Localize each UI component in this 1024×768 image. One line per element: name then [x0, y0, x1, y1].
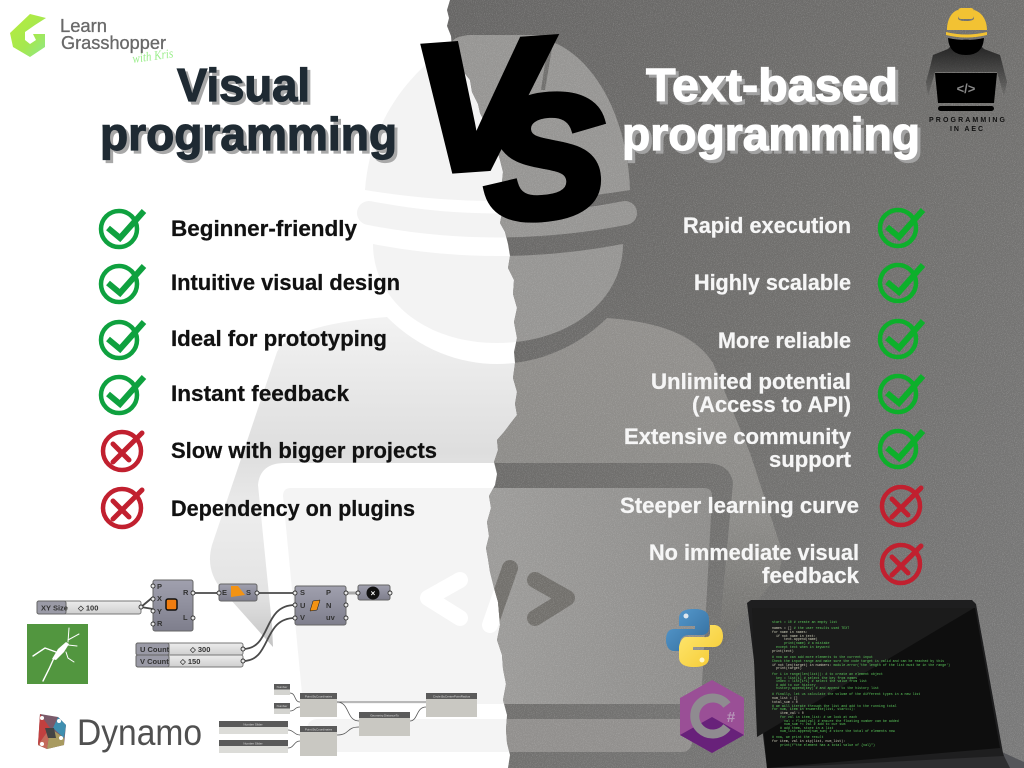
- code text on screen: val = float(val) # ensure the floating number can be added: [784, 719, 899, 723]
- pro: Instant feedback: Instant feedback: [171, 381, 350, 406]
- pro: Highly scalable: Highly scalable: [694, 270, 851, 295]
- code text on screen: # we will iterate through the list and add to the running total: [772, 704, 897, 708]
- icon: green spiral G: [10, 14, 46, 57]
- heading: Visual programming: programming: [100, 108, 397, 160]
- pro: Extensive community support: Extensive community: [624, 424, 852, 449]
- pro: Ideal for prototyping: [101, 322, 387, 358]
- con: No immediate visual feedback: No immediate visual: [649, 540, 859, 565]
- component: evaluate surface grid: P: [326, 588, 331, 597]
- list: text-based programming pros and cons: [620, 210, 923, 588]
- code text on screen: history.append(key) # and append to the history list: [776, 686, 879, 690]
- code text on screen: print(target): [776, 666, 802, 670]
- node: Circle.ByCenterPointRadius: Circle.ByCenterPointRadius: [433, 694, 471, 698]
- code text on screen: print(f"the element has a total value of {val}"): [780, 743, 875, 747]
- pro: Rapid execution: [683, 210, 923, 246]
- node: Number inputs: [274, 684, 290, 714]
- pro: Beginner-friendly: Beginner-friendly: [171, 216, 358, 241]
- component: evaluate surface grid: uv: [326, 613, 336, 622]
- pro: Beginner-friendly: [101, 211, 358, 247]
- component: surface: [217, 584, 259, 601]
- component: surface: S: [246, 588, 251, 597]
- panel: torn dark textured right background: [447, 0, 1024, 768]
- component: rectangle: X: [157, 594, 162, 603]
- pro: Unlimited potential: Unlimited potential: [651, 369, 851, 394]
- code text on screen: for item, val in zip(list, num_list):: [772, 739, 845, 743]
- node: Number sliders: [219, 721, 288, 753]
- logo: Dynamo: [38, 712, 202, 753]
- code text on screen: for num, item in enumerate(list, start=1):: [772, 707, 855, 711]
- text: code brackets: </>: [957, 81, 976, 96]
- code text on screen: if not len(target) in numbers: module.error('the length of the list must be in the range'): [772, 663, 950, 667]
- node: Point.ByCoordinates: Point.ByCoordinates: [305, 694, 333, 698]
- code text on screen: print(text): [772, 649, 794, 653]
- component: rectangle: L: [183, 613, 188, 622]
- code text on screen: text.append(name): [784, 637, 818, 641]
- list: visual programming pros and cons: [101, 211, 437, 527]
- pro: More reliable: More reliable: [718, 328, 851, 353]
- code text on screen: for val in item_list: # we look at each: [780, 715, 857, 719]
- code text on screen: total_sum = 0: [772, 700, 798, 704]
- component: preview: ×: [371, 589, 376, 598]
- code text on screen: start = 10 # create an empty list: [772, 620, 837, 624]
- code text on screen: # add them, store in a list: [780, 726, 833, 730]
- code text on screen: index = list[i+1] # select the value from list: [776, 679, 867, 683]
- code text on screen: Check the input range and make sure the code target is valid and can be reached by this: [772, 659, 944, 663]
- component: rectangle: R: [157, 619, 163, 628]
- code text on screen: # finally, let us calculate the volume of the different types in a new list: [772, 692, 920, 696]
- component: evaluate surface grid: S: [300, 588, 305, 597]
- component: preview: [356, 585, 392, 600]
- icon: Python logo: [666, 609, 723, 667]
- component: rectangle: P: [157, 582, 162, 591]
- heading: Visual programming: [100, 59, 397, 160]
- code text on screen: except text when in keyword: [776, 645, 829, 649]
- icon: Dynamo cube: [38, 714, 66, 749]
- code text on screen: for name in names:: [772, 630, 808, 634]
- code text on screen: num_sum += val # add to our sum: [784, 722, 845, 726]
- node: Point.ByCoordinates: [300, 693, 337, 717]
- heading: Text-based programming: Text-based: [646, 59, 898, 111]
- pro: Highly scalable: [694, 265, 923, 301]
- slider: XY Size: ◇ 100: [77, 604, 98, 612]
- code text on screen: key = list[i] # select the key from names: [776, 676, 857, 680]
- title: VS: V: [407, 0, 565, 210]
- wires: [288, 693, 426, 748]
- code text on screen: print(name) # a mistake: [784, 641, 830, 645]
- code text on screen: for i in range(len(list)): # to create an element object: [772, 672, 883, 676]
- component: rectangle: Y: [157, 607, 162, 616]
- text: Dynamo: Dynamo: [77, 712, 202, 753]
- title: VS: S: [477, 58, 611, 257]
- logo: Learn Grasshopper: [10, 14, 174, 66]
- con: Steeper learning curve: Steeper learning curve: [620, 493, 859, 518]
- pro: Extensive community support: support: [769, 447, 852, 472]
- pro: Intuitive visual design: Intuitive visual design: [171, 270, 400, 295]
- pro: More reliable: [718, 321, 923, 357]
- slider: V Count: V Count: [140, 657, 169, 666]
- code text on screen: # now, we print the result: [772, 735, 823, 739]
- text: Grasshopper: Grasshopper: [61, 33, 166, 53]
- pro: Unlimited potential: (Access to API): [692, 392, 851, 417]
- text: with Kris: with Kris: [131, 45, 174, 66]
- pro: Instant feedback: [101, 377, 350, 413]
- code text on screen: # now we can add more elements to the current input: [772, 655, 873, 659]
- icon: Grasshopper logo: [27, 624, 88, 684]
- node: Point.ByCoordinates second: Point.ByCoordinates: [305, 728, 333, 732]
- pro: Extensive community support: [624, 424, 923, 472]
- text: IN AEC: IN AEC: [950, 126, 983, 133]
- code text on screen: item_val = 0: [780, 711, 804, 715]
- con: Slow with bigger projects: [103, 432, 437, 470]
- code text on screen: num_list.append(num_sum) # store the total of elements now: [780, 729, 895, 733]
- title: VS: [407, 0, 611, 257]
- wires: [141, 593, 358, 661]
- node: Number sliders: Number Slider: [243, 742, 263, 746]
- slider: V Count: [136, 655, 245, 667]
- node: Circle.ByCenterPointRadius: [426, 693, 477, 717]
- slider: XY Size: [37, 601, 143, 614]
- pro: Rapid execution: Rapid execution: [683, 213, 851, 238]
- pro: Ideal for prototyping: Ideal for prototyping: [171, 326, 387, 351]
- con: No immediate visual feedback: [649, 540, 921, 588]
- code text on screen: names = [] # the user results used TEXT: [772, 626, 849, 630]
- code text on screen: # add to our history: [776, 683, 816, 687]
- slider: XY Size: XY Size: [41, 604, 68, 612]
- node: Number sliders: Number Slider: [243, 722, 263, 726]
- text: Learn: Learn: [60, 16, 107, 36]
- con: Dependency on plugins: [103, 489, 415, 527]
- con: Steeper learning curve: [620, 487, 921, 525]
- slider: U Count: ◇ 300: [189, 645, 210, 654]
- component: evaluate surface grid: V: [300, 613, 305, 622]
- icon: C# logo: [680, 680, 744, 753]
- heading: Visual programming: Visual: [177, 59, 310, 111]
- con: Slow with bigger projects: Slow with bigger projects: [171, 438, 437, 463]
- con: Dependency on plugins: Dependency on plugins: [171, 496, 415, 521]
- diagram: Grasshopper component network: [37, 580, 392, 667]
- heading: Text-based programming: programming: [622, 108, 920, 160]
- node: Geometry.DistanceTo: [359, 712, 410, 736]
- code text on screen: if not name in text:: [776, 634, 816, 638]
- slider: V Count: ◇ 150: [179, 657, 200, 666]
- node: Number inputs: Number: [277, 704, 287, 708]
- watermark: engineer figure on white side: [210, 35, 782, 752]
- component: evaluate surface grid: N: [326, 601, 331, 610]
- node: Geometry.DistanceTo: Geometry.DistanceTo: [370, 714, 399, 718]
- component: surface: E: [222, 588, 227, 597]
- pro: Intuitive visual design: [101, 266, 400, 302]
- watermark: engineer figure on dark side: [452, 35, 782, 752]
- code text on screen: num_list = []: [772, 696, 798, 700]
- slider: U Count: U Count: [140, 645, 170, 654]
- slider: U Count: [136, 643, 245, 655]
- heading: Text-based programming: [622, 59, 920, 160]
- code text on screen: [772, 620, 950, 747]
- logo: Programming in AEC: [926, 8, 1007, 133]
- component: rectangle: [151, 580, 195, 631]
- icon: C# logo: #: [727, 709, 736, 726]
- pro: Unlimited potential: [651, 369, 923, 417]
- component: evaluate surface grid: [293, 586, 348, 625]
- image: laptop showing code: [747, 600, 1024, 768]
- node: Number inputs: Number: [277, 685, 287, 689]
- con: No immediate visual feedback: feedback: [762, 563, 860, 588]
- component: evaluate surface grid: U: [300, 601, 305, 610]
- component: rectangle: R: [183, 588, 189, 597]
- text: PROGRAMMING: PROGRAMMING: [929, 117, 1006, 124]
- node: Point.ByCoordinates second: [300, 726, 337, 756]
- diagram: Dynamo node graph: [219, 684, 477, 756]
